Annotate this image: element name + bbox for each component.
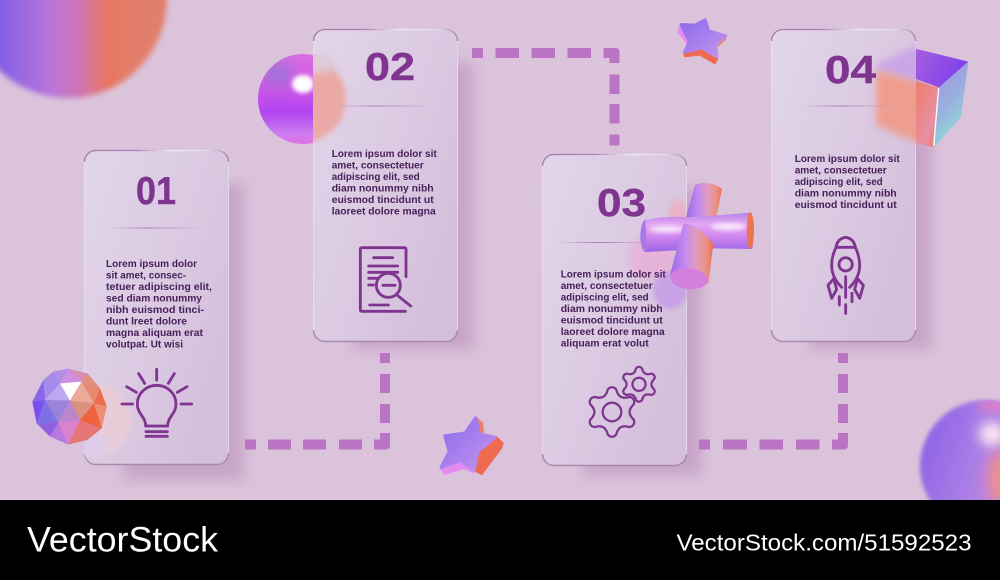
connector: step 3 to step 4 — [699, 353, 848, 450]
text block: volutpat. Ut wisi — [106, 338, 183, 350]
text block: adipiscing elit, sed — [561, 292, 649, 304]
number 01: 01 — [136, 170, 176, 213]
text block: euismod tincidunt ut — [561, 314, 663, 326]
3d cube behind card 4 — [910, 47, 968, 147]
card shadows — [124, 62, 932, 480]
blurred sphere: bottom right corner — [917, 398, 1000, 500]
3d sphere behind card 2 — [258, 54, 313, 144]
number 04: 04 — [825, 49, 877, 92]
text block: sed diam nonummy — [106, 292, 202, 304]
number 03: 03 — [597, 182, 646, 225]
text block: Lorem ipsum dolor — [106, 258, 197, 270]
3d gem — [32, 369, 107, 444]
card 1 — [84, 150, 230, 466]
divider — [558, 242, 658, 243]
frosted reflection of cube — [876, 45, 925, 145]
icon: light bulb — [122, 369, 192, 436]
text block: Lorem ipsum dolor sit — [332, 148, 437, 160]
text block: Lorem ipsum dolor sit — [561, 268, 666, 280]
text block: diam nonummy nibh — [795, 188, 897, 200]
card 4 — [771, 29, 925, 342]
image url: VectorStock.com/51592523 — [676, 530, 972, 556]
connector: step 2 to step 3 — [472, 48, 620, 146]
divider — [336, 106, 434, 107]
card 2 — [312, 28, 458, 342]
card 3 — [542, 154, 687, 466]
icon: gears — [590, 367, 655, 437]
text block: amet, consectetuer — [795, 164, 887, 176]
text block: diam nonummy nibh — [332, 182, 434, 194]
text block: aliquam erat volut — [561, 338, 649, 350]
number 02: 02 — [365, 46, 415, 89]
text block — [106, 258, 212, 350]
3d star: top — [678, 20, 727, 64]
text block: adipiscing elit, sed — [795, 176, 883, 188]
text block: nibh euismod tinci- — [106, 304, 205, 316]
brand name: VectorStock — [27, 521, 219, 560]
icon: rocket — [828, 237, 863, 313]
frosted reflection of sphere — [313, 53, 349, 144]
text block: amet, consectetuer — [561, 280, 653, 292]
text block: amet, consectetuer — [332, 160, 424, 172]
footer bar — [0, 500, 1000, 580]
blurred sphere: top left corner — [0, 0, 167, 98]
frosted reflection of cross — [628, 199, 687, 309]
text block: adipiscing elit, sed — [332, 171, 420, 183]
text block: laoreet dolore magna — [332, 206, 436, 218]
text block — [795, 153, 900, 211]
3d cross — [640, 183, 754, 291]
3d star: bottom — [440, 417, 503, 474]
text block — [332, 148, 437, 218]
divider — [106, 228, 206, 229]
text block — [561, 268, 666, 350]
text block: dunt lreet dolore — [106, 316, 187, 328]
text block: Lorem ipsum dolor sit — [795, 153, 900, 165]
text block: tetuer adipiscing elit, — [106, 281, 212, 293]
text block: laoreet dolore magna — [561, 326, 665, 338]
text block: sit amet, consec- — [106, 270, 186, 282]
frosted reflection of gem — [84, 386, 130, 460]
text block: euismod tincidunt ut — [795, 199, 897, 211]
icon: document with magnifier — [360, 248, 411, 311]
text block: diam nonummy nibh — [561, 303, 663, 315]
text block: magna aliquam erat — [106, 327, 203, 339]
divider — [800, 106, 898, 107]
connector: step 1 to step 2 — [245, 353, 390, 450]
text block: euismod tincidunt ut — [332, 194, 434, 206]
